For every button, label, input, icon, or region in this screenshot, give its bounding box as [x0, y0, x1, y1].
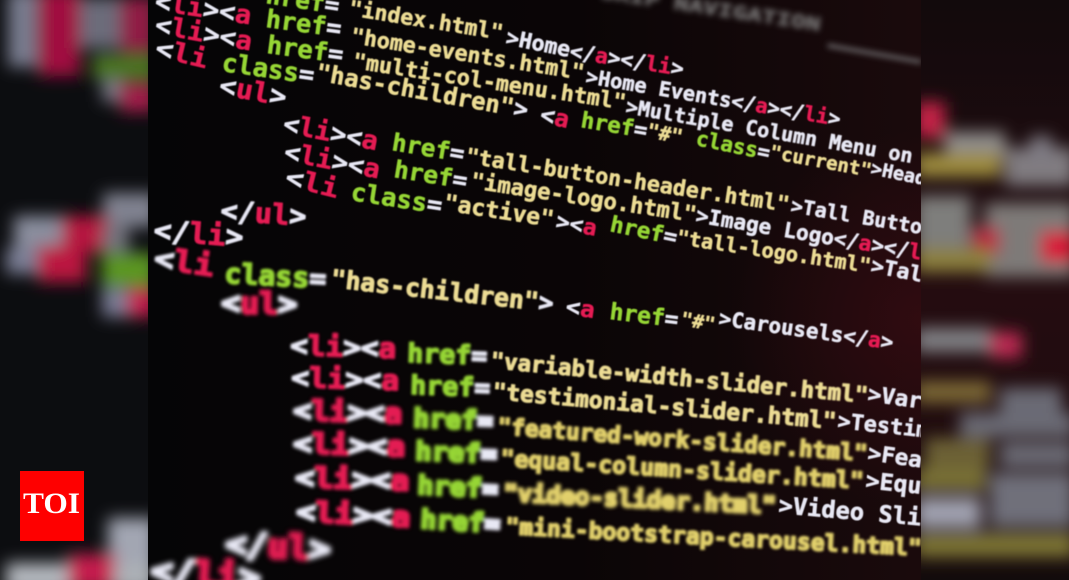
- code line: multi-col-menu: <li><a: [153, 10, 255, 57]
- code line: has-children list item: <a: [538, 100, 572, 134]
- code line: tall-button-header: href=: [390, 128, 467, 168]
- panel: right blurred backdrop: [915, 0, 1069, 580]
- code line: testimonial-slider: href=: [410, 371, 491, 404]
- code line: featured-work-slider: href=: [413, 404, 494, 437]
- code line: index: >Home: [504, 25, 573, 63]
- code line: tall-button-header: "tall-button-header.html": [464, 144, 791, 218]
- code line: active tall-logo: ><a: [554, 209, 599, 242]
- code line: video-slider: <li><a: [295, 461, 410, 497]
- code line: tall-button-header: <li><a: [281, 109, 381, 157]
- code line: testimonial-slider: <li><a: [291, 361, 400, 397]
- code line: closing ul: </ul>: [220, 194, 308, 233]
- code line: multi-col-menu: [155, 16, 912, 164]
- code line: opening ul: <ul>: [217, 70, 289, 113]
- code line: featured-work-slider: [290, 394, 921, 468]
- code line: home-events: href=: [264, 4, 343, 43]
- code line: testimonial-slider: "testimonial-slider.html": [491, 379, 837, 435]
- panel: code screen: [148, 0, 965, 580]
- code line: variable-width-slider: <li><a: [290, 329, 397, 365]
- code line: closing ul bottom: </ul>: [225, 524, 331, 568]
- code line: home-events: [153, 0, 843, 131]
- code line: featured-work-slider: >Feat: [866, 441, 937, 475]
- code line: image-logo: href=: [392, 155, 470, 195]
- code line: active tall-logo: "tall-logo.html": [675, 225, 873, 278]
- code line: image-logo: "image-logo.html": [469, 168, 698, 228]
- code line: variable-width-slider: "variable-width-slider.html": [489, 348, 869, 409]
- code line: equal-column-slider: [290, 427, 921, 498]
- code line: has-children list item: "current": [768, 141, 873, 182]
- code line: testimonial-slider: >Testim: [836, 409, 930, 444]
- code line: has-children carousels: <a: [564, 294, 597, 324]
- code line: has-children list item: "has-children">: [314, 58, 530, 124]
- code line: active tall-logo: "active": [442, 190, 556, 233]
- code line: variable-width-slider: href=: [407, 339, 488, 372]
- code line: has-children list item: class=: [694, 126, 772, 165]
- code line: has-children carousels: class=: [224, 257, 327, 295]
- code line: video-slider: href=: [417, 471, 499, 505]
- code line: has-children carousels: "has-children">: [329, 264, 555, 318]
- code line: equal-column-slider: >Equal: [864, 468, 951, 503]
- code line: multi-col-menu: >Multiple Column Menu on C: [624, 94, 939, 172]
- code line: has-children carousels: <li: [152, 241, 216, 284]
- code line: multi-col-menu: "multi-col-menu.html": [351, 49, 628, 116]
- code line: featured-work-slider: <li><a: [293, 394, 403, 430]
- code line: home-events: >Home Events</a></li>: [584, 64, 843, 131]
- code line: home-events: "home-events.html": [349, 24, 586, 86]
- code line: has-children list item: [152, 34, 928, 190]
- code line: active tall-logo: <li: [282, 163, 342, 205]
- code line: index: [264, 0, 686, 81]
- code line: tall-button-header: [283, 114, 921, 234]
- code line: testimonial-slider: [291, 361, 930, 444]
- code line: carousels ul: <ul>: [221, 286, 297, 322]
- logo: TOI badge: TOI: [23, 487, 80, 520]
- code line: variable-width-slider: >Vari: [866, 382, 937, 416]
- code line: mini-bootstrap-carousel: href=: [420, 505, 501, 540]
- code line: has-children list item: class=: [220, 48, 316, 91]
- code line: has-children carousels: >Carousels</a>: [717, 306, 895, 354]
- code line: has-children list item: >Head: [869, 158, 928, 190]
- code line: has-children carousels: href=: [608, 299, 680, 333]
- code line: mini-bootstrap-carousel: "mini-bootstrap-carousel.html": [505, 514, 922, 562]
- code line: video-slider: "video-slider.html": [503, 479, 777, 520]
- code line: active tall-logo: class=: [349, 177, 444, 220]
- code line: featured-work-slider: "featured-work-slider.html": [497, 414, 868, 467]
- code line: active tall-logo: >Tal: [869, 253, 925, 287]
- code line: image-logo: >Image Logo</a></li>: [694, 203, 949, 269]
- code line: video-slider: [292, 462, 921, 526]
- code line: tall-button-header: >Tall Button: [789, 193, 936, 241]
- code line: has-children list item: href=: [579, 108, 649, 144]
- code line: image-logo: <li><a: [282, 137, 383, 185]
- code line: equal-column-slider: <li><a: [293, 427, 406, 463]
- code line: variable-width-slider: [288, 330, 921, 408]
- code line: has-children carousels: [152, 241, 895, 354]
- code line: mini-bootstrap-carousel: [296, 495, 922, 562]
- code line: active tall-logo: href=: [608, 212, 679, 251]
- code line: equal-column-slider: "equal-column-slider.html": [500, 445, 865, 495]
- code line: active tall-logo: [282, 163, 925, 287]
- blurred page header text: [599, 0, 922, 64]
- panel: left blurred backdrop: [0, 0, 157, 580]
- code line: mini-bootstrap-carousel: <li><a: [296, 495, 411, 534]
- code line: has-children list item: <li: [152, 34, 211, 75]
- code line: equal-column-slider: href=: [415, 437, 498, 470]
- code line: has-children carousels: "#": [679, 308, 717, 336]
- code line: has-children list item: "#": [645, 118, 685, 149]
- logo: TOI badge: [20, 471, 84, 541]
- code line: image-logo: [284, 143, 921, 260]
- code line: multi-col-menu: href=: [265, 30, 345, 69]
- code line: video-slider: >Video Slider: [777, 491, 965, 535]
- code line: index: </a></li>: [568, 39, 686, 81]
- code line: closing li: </li>: [152, 213, 245, 254]
